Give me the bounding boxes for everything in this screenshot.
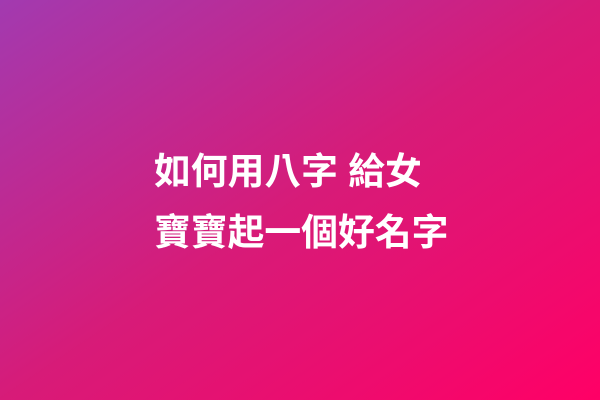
title line 2: 寶寶起一個好名字 [154, 212, 448, 252]
title line 1: 如何用八字 給女 [154, 151, 422, 192]
